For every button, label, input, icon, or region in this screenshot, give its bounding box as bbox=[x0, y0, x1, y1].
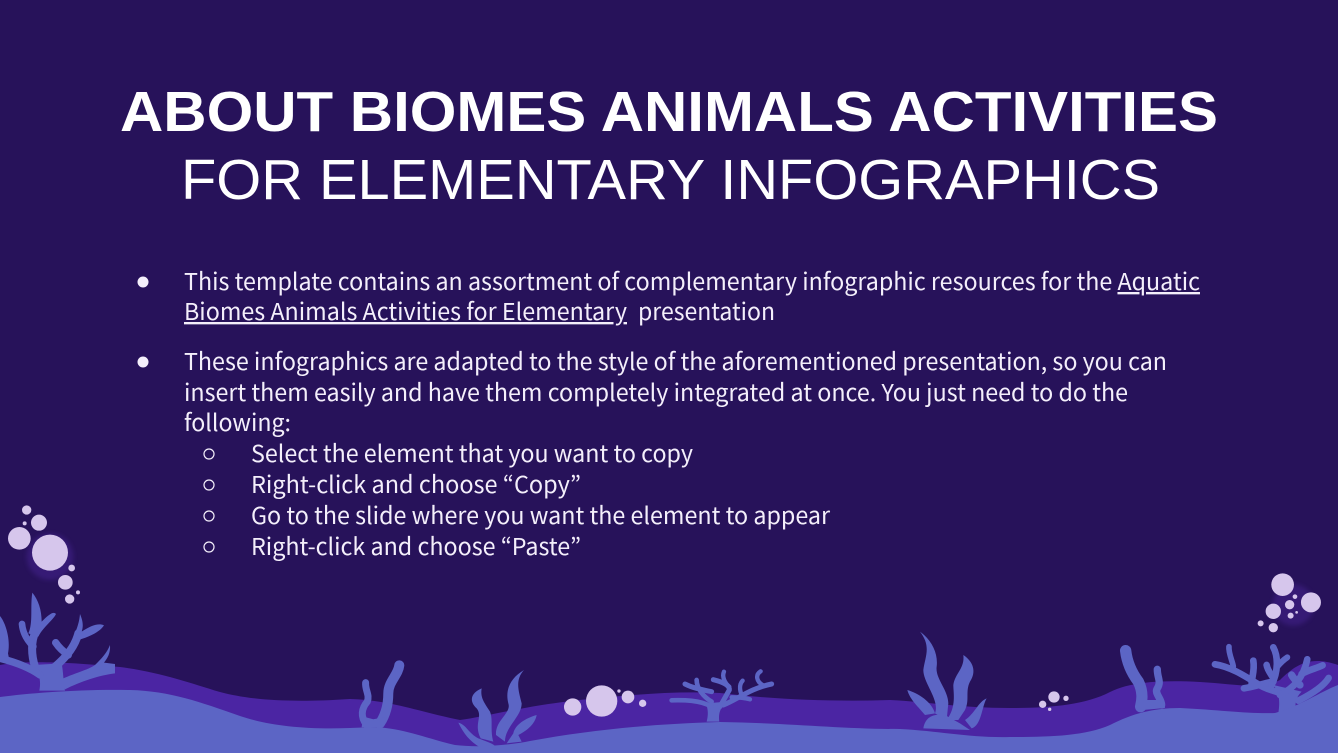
seaweed right tall bbox=[907, 632, 987, 730]
body text: instructions list: insert them easily and have them completely integrated at once. You just need to do the bbox=[184, 374, 1128, 408]
title: FOR ELEMENTARY INFOGRAPHICS bbox=[181, 148, 1160, 212]
body text: instructions list: presentation bbox=[638, 293, 775, 327]
bubbles: left cluster bbox=[8, 505, 80, 604]
branching coral right bbox=[1215, 647, 1329, 713]
body text: instructions list bbox=[138, 263, 1200, 562]
seabed: front wave bbox=[0, 685, 1338, 753]
bubbles: center cluster bbox=[564, 685, 646, 717]
bubbles: right cluster bbox=[1258, 573, 1321, 632]
title: ABOUT BIOMES ANIMALS ACTIVITIES bbox=[120, 80, 1218, 144]
seaweed right small bbox=[1126, 651, 1165, 711]
left coral bbox=[0, 593, 115, 691]
body text: instructions list: Right-click and choose “Copy” bbox=[251, 466, 581, 500]
body text: instructions list: These infographics are adapted to the style of the aforementioned presentation, so you can bbox=[184, 343, 1167, 377]
body text: instructions list: Go to the slide where you want the element to appear bbox=[251, 497, 831, 531]
body text: instructions list: This template contains an assortment of complementary infographic resources for the Aquatic bbox=[184, 263, 1200, 297]
seabed: back wave bbox=[0, 661, 1338, 753]
body text: instructions list: Select the element that you want to copy bbox=[251, 435, 693, 469]
seafloor-center plants and coral bbox=[458, 670, 772, 747]
branching coral center bbox=[672, 671, 772, 722]
body text: instructions list: following: bbox=[184, 404, 291, 438]
seafloor-right plants and coral bbox=[907, 632, 1329, 730]
title bbox=[120, 80, 1218, 212]
seaweed center bbox=[458, 670, 537, 747]
seaweed left bbox=[362, 665, 399, 727]
body text: instructions list: Right-click and choose “Paste” bbox=[251, 528, 581, 562]
body text: instructions list: Biomes Animals Activities for Elementary bbox=[184, 293, 627, 327]
bubbles: small right-center cluster bbox=[1039, 691, 1069, 711]
